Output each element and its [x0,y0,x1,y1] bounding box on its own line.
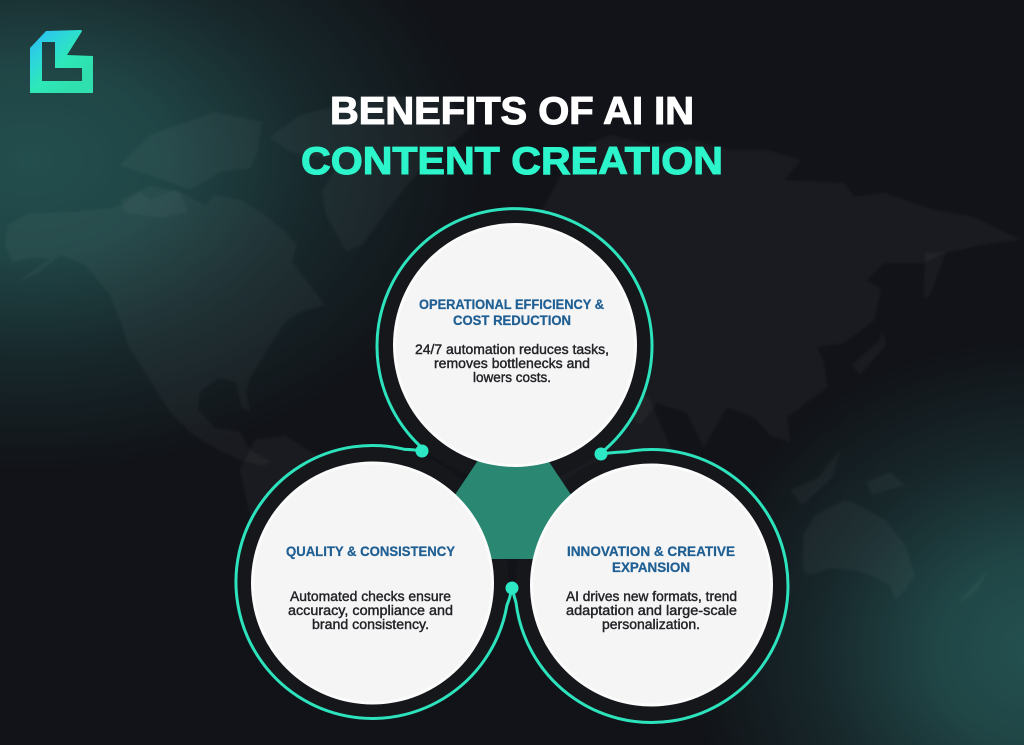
body: innovation and creative expansion: adaptation and large-scale [566,603,737,618]
world map [5,95,1021,620]
heading: innovation and creative expansion [567,544,735,575]
body: quality and consistency: Automated checks ensure [290,589,451,604]
centre triangle [412,408,614,559]
panel: innovation and creative expansion [530,464,773,706]
body: quality and consistency: accuracy, compliance and [288,603,453,618]
top ring [377,209,652,453]
heading: operational efficiency [419,297,604,328]
logo [30,30,93,93]
heading: quality and consistency: QUALITY & CONSISTENCY [286,544,455,559]
body: innovation and creative expansion: personalization. [602,617,700,632]
dark discs behind circles [236,209,788,722]
connector dots [416,444,608,594]
body: operational efficiency: 24/7 automation reduces tasks, [415,342,609,357]
right ring [512,450,788,723]
body: quality and consistency: brand consistency. [312,617,429,632]
connector rings [236,209,788,723]
body: innovation and creative expansion: AI drives new formats, trend [566,589,737,604]
panel: operational efficiency [393,223,637,467]
title [301,90,723,183]
body: operational efficiency: lowers costs. [473,370,551,385]
heading: innovation and creative expansion: EXPANSION [612,560,690,575]
heading: innovation and creative expansion: INNOVATION & CREATIVE [567,544,735,559]
title line 1: BENEFITS OF AI IN [330,90,694,133]
heading: operational efficiency: OPERATIONAL EFFICIENCY & [419,297,604,312]
title line 2: CONTENT CREATION [301,140,723,183]
body: operational efficiency [415,342,609,385]
panel: quality and consistency [251,462,494,704]
left ring [236,445,512,718]
heading: operational efficiency: COST REDUCTION [453,313,571,328]
body: operational efficiency: removes bottlenecks and [434,356,590,371]
body: innovation and creative expansion [566,589,737,632]
body: quality and consistency [288,589,453,632]
